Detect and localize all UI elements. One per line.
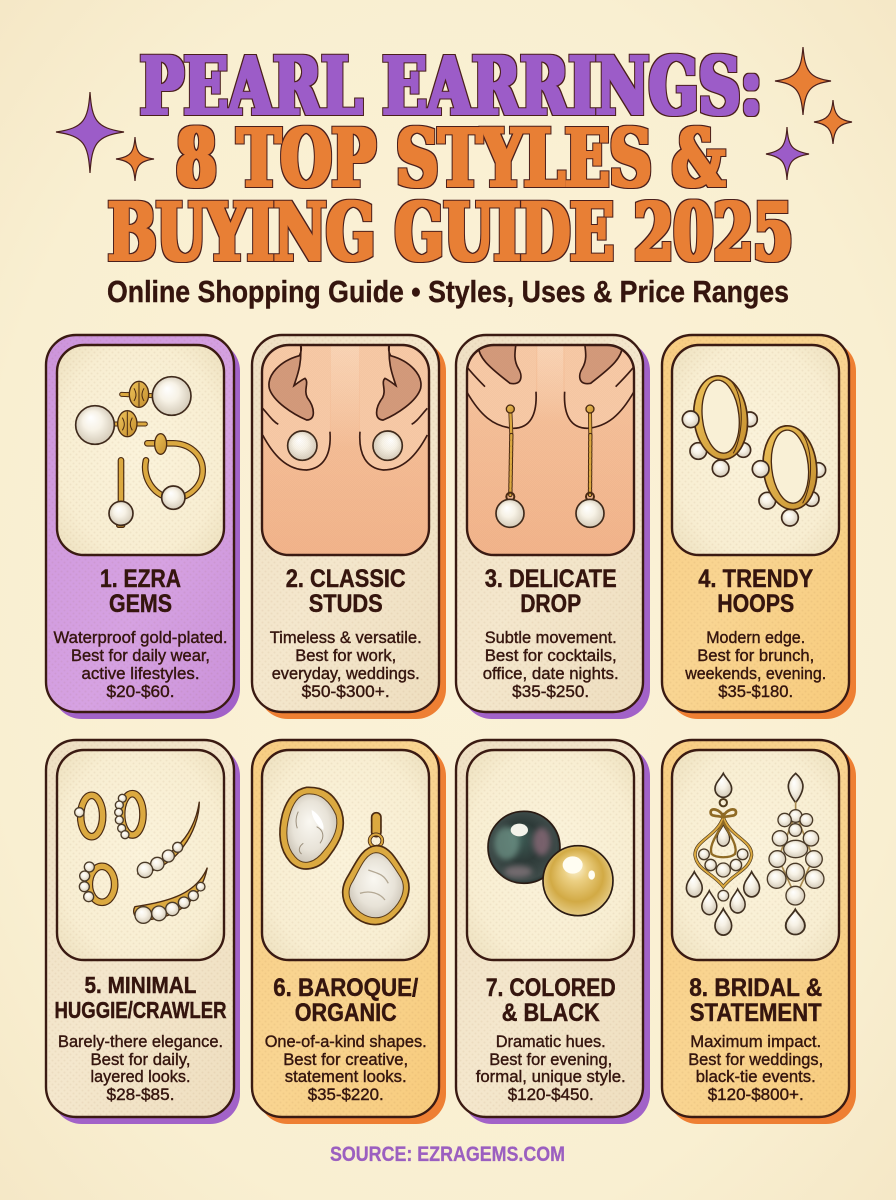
description and price xyxy=(54,628,228,701)
heading: HUGGIE/CRAWLER xyxy=(54,997,227,1023)
heading xyxy=(486,974,616,1027)
description and price: weekends, evening. xyxy=(684,664,826,683)
description and price xyxy=(684,628,826,701)
card shape xyxy=(252,740,446,1124)
description and price: Best for creative, xyxy=(283,1050,408,1069)
heading: HOOPS xyxy=(717,590,794,618)
description and price: Dramatic hues. xyxy=(496,1032,606,1051)
description and price: Best for evening, xyxy=(489,1050,612,1069)
description and price: Barely-there elegance. xyxy=(58,1032,223,1051)
description and price xyxy=(483,628,619,701)
heading xyxy=(698,565,813,618)
description and price: $20-$60. xyxy=(106,682,174,701)
description and price: Best for brunch, xyxy=(697,646,814,665)
heading: 8. BRIDAL & xyxy=(689,974,822,1002)
description and price: formal, unique style. xyxy=(476,1067,626,1086)
card shape xyxy=(252,335,446,719)
panel: 7. Colored & Black xyxy=(456,740,650,1124)
heading: STATEMENT xyxy=(690,999,822,1027)
heading xyxy=(286,565,406,618)
title xyxy=(108,39,793,279)
heading xyxy=(273,974,418,1027)
heading xyxy=(54,972,227,1023)
illustration frame xyxy=(262,345,429,555)
subtitle: Online Shopping Guide • Styles, Uses & Price Ranges xyxy=(107,274,789,309)
heading: & BLACK xyxy=(502,999,600,1027)
illustration: baroque pearl earrings xyxy=(280,787,409,925)
card shape xyxy=(662,740,856,1124)
heading: 2. CLASSIC xyxy=(286,565,406,593)
description and price: $50-$300+. xyxy=(302,682,390,701)
heading: 7. COLORED xyxy=(486,974,616,1002)
card shape xyxy=(456,335,650,719)
description and price: statement looks. xyxy=(285,1067,407,1086)
heading: STUDS xyxy=(309,590,383,618)
heading xyxy=(485,565,617,618)
panel: 1. Ezra Gems xyxy=(46,335,240,719)
illustration: gold-plated pearl studs and hoops xyxy=(76,377,203,527)
heading: DROP xyxy=(520,590,581,618)
heading: 6. BAROQUE/ xyxy=(273,974,418,1002)
illustration: ears with pearl drops on chains xyxy=(465,343,636,555)
illustration frame xyxy=(467,345,634,555)
description and price: everyday, weddings. xyxy=(272,664,420,683)
description and price: One-of-a-kind shapes. xyxy=(265,1032,427,1051)
description and price: $35-$250. xyxy=(512,682,589,701)
description and price: Best for cocktails, xyxy=(485,646,617,665)
description and price: Timeless & versatile. xyxy=(270,628,422,647)
description and price xyxy=(270,628,422,701)
card shape xyxy=(46,335,240,719)
panel: 2. Classic Studs xyxy=(252,335,446,719)
heading xyxy=(689,974,822,1027)
illustration: ears with pearl studs xyxy=(260,343,430,555)
sparkle: large orange right xyxy=(775,47,831,115)
description and price: $35-$220. xyxy=(308,1085,384,1104)
panel: 3. Delicate Drop xyxy=(456,335,650,719)
sparkle: large purple left xyxy=(56,92,124,173)
heading xyxy=(100,565,181,618)
panel: 6. Baroque/Organic xyxy=(252,740,446,1124)
illustration: huggies and ear crawlers xyxy=(75,794,207,923)
description and price xyxy=(58,1032,223,1104)
sparkle: small orange left xyxy=(116,137,154,181)
heading: ORGANIC xyxy=(295,999,397,1027)
description and price: active lifestyles. xyxy=(82,664,200,683)
heading: GEMS xyxy=(109,590,172,618)
sparkle: purple right xyxy=(766,127,809,180)
panel: 5. Minimal Huggie/Crawler xyxy=(46,740,240,1124)
description and price: Modern edge. xyxy=(706,628,805,647)
description and price: $120-$800+. xyxy=(708,1085,804,1104)
panel: 8. Bridal & Statement xyxy=(662,740,856,1124)
card shape xyxy=(662,335,856,719)
panel: 4. Trendy Hoops xyxy=(662,335,856,719)
icon: sparkles xyxy=(56,47,852,181)
description and price: $28-$85. xyxy=(106,1085,174,1104)
heading: 4. TRENDY xyxy=(698,565,813,593)
description and price: $35-$180. xyxy=(718,682,793,701)
illustration: gold hoops with pearls xyxy=(682,373,826,526)
description and price: Maximum impact. xyxy=(690,1032,821,1051)
description and price: layered looks. xyxy=(90,1067,190,1086)
illustration: chandelier pearl earrings xyxy=(686,773,824,935)
description and price: Waterproof gold-plated. xyxy=(54,628,228,647)
description and price xyxy=(688,1032,823,1104)
heading: 1. EZRA xyxy=(100,565,181,593)
description and price: $120-$450. xyxy=(508,1085,594,1104)
description and price: Best for daily wear, xyxy=(71,646,210,665)
description and price: black-tie events. xyxy=(696,1067,816,1086)
card shape xyxy=(46,740,240,1124)
description and price: office, date nights. xyxy=(483,664,619,683)
description and price: Best for weddings, xyxy=(688,1050,823,1069)
heading: 3. DELICATE xyxy=(485,565,617,593)
illustration: black and golden pearls xyxy=(488,811,613,916)
description and price: Subtle movement. xyxy=(485,628,617,647)
description and price xyxy=(476,1032,626,1104)
card shape xyxy=(456,740,650,1124)
description and price: Best for daily, xyxy=(90,1050,190,1069)
sparkle: small orange right xyxy=(814,100,852,144)
source line: SOURCE: EZRAGEMS.COM xyxy=(330,1143,565,1166)
heading: 5. MINIMAL xyxy=(84,972,196,998)
description and price xyxy=(265,1032,427,1104)
description and price: Best for work, xyxy=(295,646,396,665)
